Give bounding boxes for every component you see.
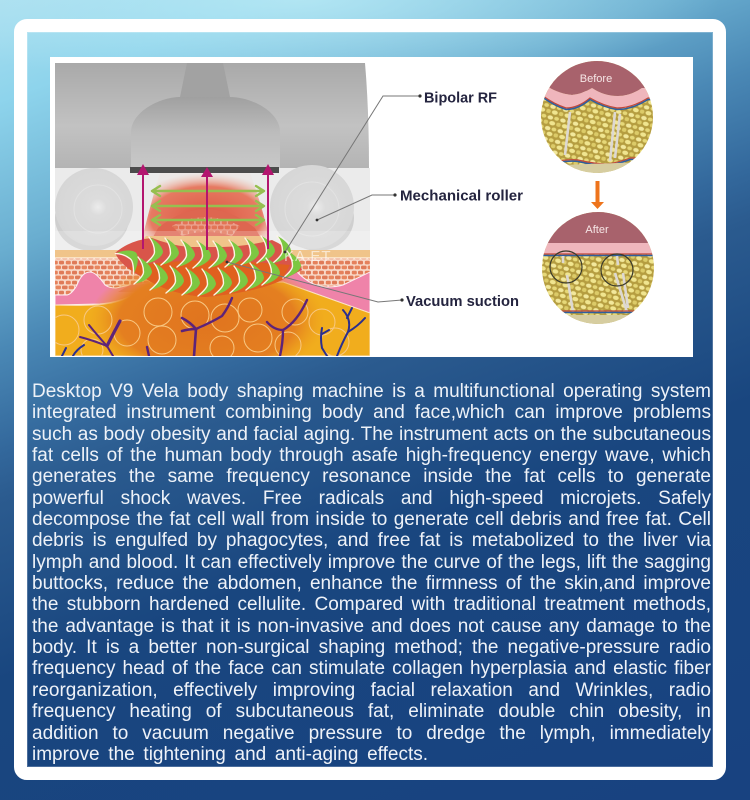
body text: addition to vacuum negative pressure to dredge the lymph, immediately: [32, 722, 711, 744]
left roller: [55, 168, 133, 251]
body text: the advantage is that it is non-invasive and does not cause any damage to the: [32, 616, 711, 637]
green horizontal arrows: [152, 186, 264, 225]
body text: Desktop V9 Vela body shaping machine is a multifunctional operating system: [32, 381, 711, 402]
body text: powerful shock waves. Free radicals and high-speed microjets. Safely: [32, 488, 711, 509]
applicator housing: [55, 63, 369, 168]
skin layers: [55, 236, 370, 356]
vacuum waves: [113, 236, 302, 297]
leader line: Bipolar RF: [284, 94, 422, 253]
watermark: KA ET: [284, 248, 332, 265]
label: Bipolar RF: Bipolar RF: [424, 90, 497, 106]
body text: body. It is a better non-surgical shaping method; the negative-pressure radio: [32, 637, 711, 658]
image background: [50, 57, 693, 357]
label: Before: Before: [580, 73, 612, 85]
magenta vertical arrows: [137, 164, 274, 250]
red energy glow: [144, 174, 270, 240]
body text: fat cells of the human body through asafe high-frequency energy wave, which: [32, 445, 711, 466]
applicator head: [130, 63, 280, 173]
leader line: Vacuum suction: [226, 261, 404, 302]
body text: frequency head of the face can stimulate collagen hyperplasia and elastic fiber: [32, 658, 711, 679]
body text: integrated instrument combining body and face,which can improve problems: [32, 402, 711, 423]
body text: buttocks, reduce the abdomen, enhance the firmness of the skin,and improve: [32, 573, 711, 594]
body text: the stubborn hardened cellulite. Compared with traditional treatment methods,: [32, 594, 711, 615]
body text: improve the tightening and anti-aging effects.: [32, 744, 428, 765]
fat cells: [49, 298, 349, 361]
body text: debris is engulfed by phagocytes, and free fat is metabolized to the liver via: [32, 530, 711, 551]
body text: lymph and blood. It can effectively improve the curve of the legs, lift the sagging: [32, 552, 711, 573]
label: Mechanical roller: Mechanical roller: [400, 188, 523, 204]
panel: treatment diagram image: [50, 57, 693, 357]
right roller: [270, 165, 354, 251]
down arrow: [591, 181, 604, 209]
body text: reorganization, effectively improving facial relaxation and Wrinkles, radio: [32, 680, 711, 701]
label: After: After: [585, 224, 609, 236]
body text: [32, 381, 711, 765]
body text: such as body obesity and facial aging. The instrument acts on the subcutaneous: [32, 424, 711, 445]
translucent band: [58, 231, 351, 250]
label: Vacuum suction: Vacuum suction: [406, 293, 519, 310]
body text: generates the same frequency resonance inside the fat cells to generate: [32, 466, 711, 487]
body text: frequency heating of subcutaneous fat, eliminate double chin obesity, in: [32, 701, 711, 722]
after circle: [540, 210, 656, 327]
fat veins: [62, 298, 365, 356]
leader line: Mechanical roller: [316, 193, 397, 221]
body text: decompose the fat cell wall from inside to generate cell debris and free fat. Cell: [32, 509, 711, 530]
illustration: applicator on skin: [49, 63, 370, 382]
before circle: [540, 60, 655, 176]
